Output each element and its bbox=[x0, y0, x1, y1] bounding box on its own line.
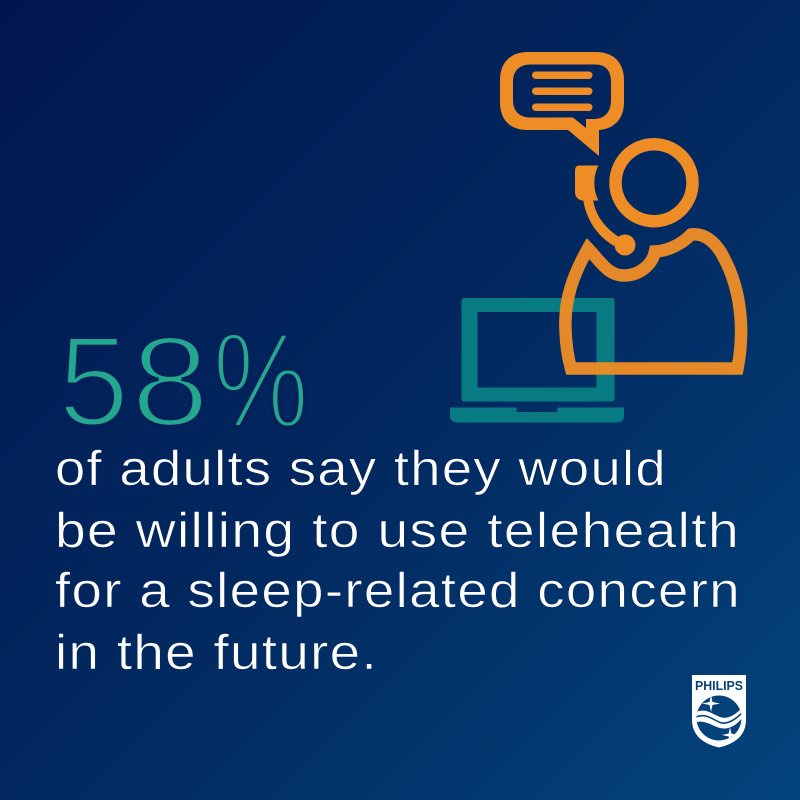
wordmark: PHILIPS bbox=[695, 679, 743, 693]
bubble outline bbox=[500, 52, 624, 156]
statistic: 58%: % bbox=[213, 304, 309, 456]
body text: for a sleep-related concern bbox=[55, 564, 741, 618]
statistic: 58%: 8 bbox=[131, 309, 209, 453]
body text: in the future. bbox=[55, 626, 378, 680]
headset boom bbox=[583, 199, 619, 246]
statistic: 58% bbox=[58, 304, 309, 456]
agent head bbox=[616, 144, 692, 221]
headset microphone bbox=[614, 234, 636, 256]
body text bbox=[55, 442, 741, 680]
bubble text lines bbox=[532, 72, 592, 111]
logo: Philips shield bbox=[692, 675, 746, 748]
icon: agent with headset bbox=[565, 144, 741, 368]
globe bbox=[696, 696, 742, 740]
headset ear piece bbox=[575, 166, 598, 200]
icon: laptop bbox=[450, 298, 624, 422]
icon: speech bubble bbox=[500, 52, 624, 156]
body text: be willing to use telehealth bbox=[55, 504, 740, 558]
agent body bbox=[565, 234, 741, 368]
statistic: 58%: 5 bbox=[58, 310, 129, 454]
shield shape bbox=[692, 675, 746, 748]
body text: of adults say they would bbox=[55, 442, 667, 496]
stars bbox=[702, 697, 720, 712]
